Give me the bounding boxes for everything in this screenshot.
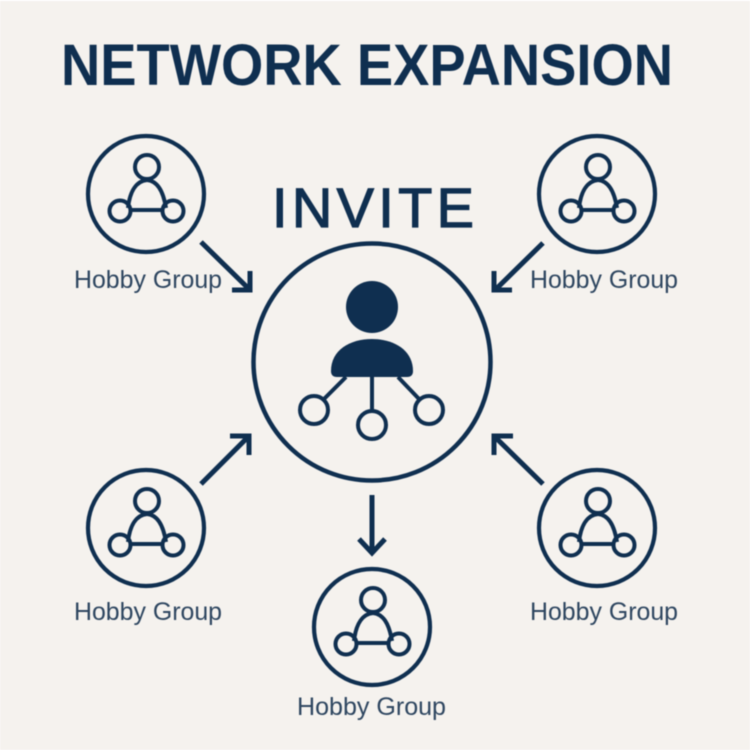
hobby group: bottom right bbox=[530, 470, 678, 626]
arrow: center down to bottom group bbox=[359, 495, 385, 553]
heading: invite: INVITE bbox=[272, 176, 474, 239]
hobby group: top left bbox=[74, 136, 222, 294]
hobby group: bottom left bbox=[74, 470, 222, 626]
arrow: bottom right to center bbox=[494, 436, 543, 484]
arrow: bottom left to center bbox=[201, 436, 249, 484]
hobby group: bottom center: Hobby Group bbox=[297, 693, 446, 721]
hobby group: top left: Hobby Group bbox=[74, 266, 222, 294]
hobby group: bottom right: Hobby Group bbox=[530, 598, 678, 626]
hobby group: bottom center bbox=[297, 569, 446, 721]
arrow: top left to center bbox=[201, 242, 250, 290]
hobby group: top right bbox=[530, 136, 678, 294]
hobby group: top right: Hobby Group bbox=[530, 266, 678, 294]
central person icon bbox=[254, 244, 490, 480]
arrow: top right to center bbox=[494, 243, 543, 290]
hobby group: bottom left: Hobby Group bbox=[74, 598, 222, 626]
title: NETWORK EXPANSION bbox=[61, 33, 673, 98]
